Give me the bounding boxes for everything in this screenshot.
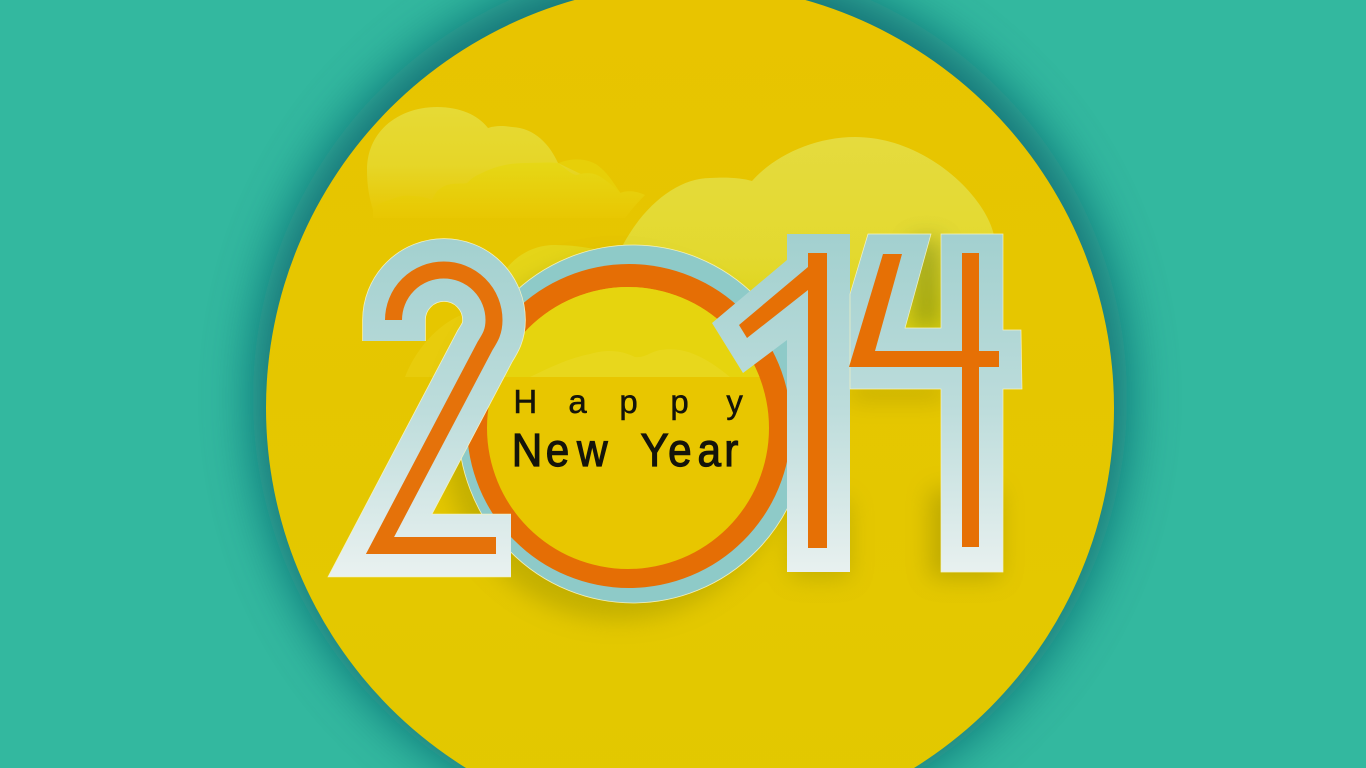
digit 0: ring bbox=[458, 245, 808, 603]
stem one shadow bbox=[790, 500, 850, 578]
digit 2 bbox=[380, 270, 511, 546]
cloud: upper left back bbox=[367, 107, 580, 206]
greeting text: New Year: New Year bbox=[512, 425, 738, 476]
four orange shape bbox=[849, 253, 999, 547]
ring shadow bbox=[444, 260, 792, 620]
flag shadow bbox=[700, 320, 755, 370]
two edge highlight bbox=[380, 270, 511, 546]
yellow disc bbox=[266, 0, 1114, 768]
cloud: low left behind two bbox=[405, 315, 462, 377]
cloud: small lump behind left cloud bbox=[559, 160, 620, 192]
ring outer teal bbox=[458, 245, 808, 603]
greeting text: Happy: Happy bbox=[513, 383, 743, 420]
two orange stroke bbox=[380, 270, 496, 546]
digit 4 bbox=[849, 234, 1022, 572]
digit 1 bbox=[712, 234, 850, 572]
cloud: behind ring bbox=[507, 245, 594, 288]
ring inner small cloud bbox=[530, 349, 730, 377]
cloud: upper left front bbox=[438, 162, 644, 202]
two pale stroke bbox=[380, 270, 511, 546]
stem four shadow bbox=[930, 490, 1000, 578]
clouds bbox=[367, 107, 1003, 377]
cloud: large right bbox=[623, 137, 994, 328]
one orange shape bbox=[739, 253, 827, 548]
ring inner sky and ground bbox=[487, 287, 769, 569]
four inner shadow bbox=[912, 240, 941, 328]
ring inner cloud bbox=[505, 287, 760, 377]
crossbar shadow bbox=[850, 385, 945, 399]
one pale shape bbox=[712, 234, 850, 572]
ground shadows below digits bbox=[444, 240, 1000, 620]
ring orange band bbox=[467, 264, 791, 588]
yellow disc drop shadow bbox=[253, 0, 1127, 768]
four pale shape bbox=[850, 234, 1022, 572]
